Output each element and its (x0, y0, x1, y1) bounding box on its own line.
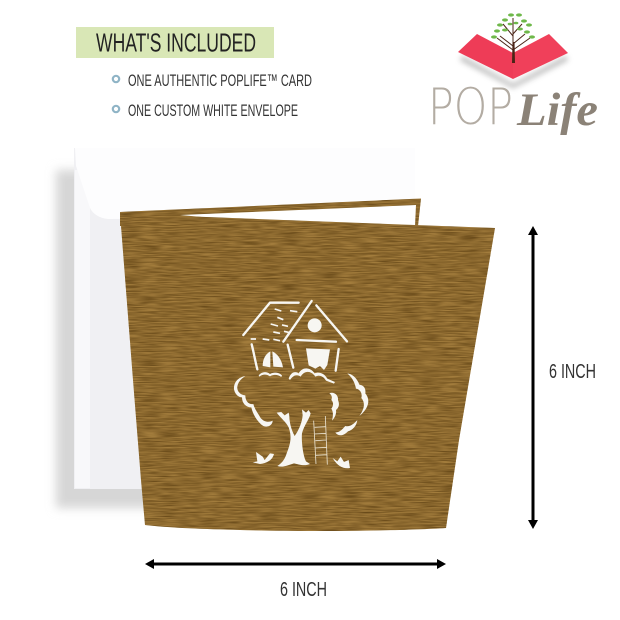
arrow: width dimension (145, 559, 446, 569)
grass right (333, 457, 350, 468)
logo: wordmark pop: POP (428, 78, 513, 136)
envelope: shadow (56, 170, 336, 508)
front window (306, 348, 330, 370)
logo: book shadow (460, 56, 568, 88)
card: treehouse cutout (234, 301, 368, 468)
tree trunk (277, 409, 311, 467)
logo: poplife (428, 13, 598, 136)
grass left (253, 452, 274, 464)
label: width 6 inch: 6 INCH (280, 579, 327, 601)
logo: tree (491, 13, 535, 63)
side windows (263, 351, 270, 367)
card: back panel (120, 198, 422, 228)
envelope: body (74, 148, 415, 489)
label: height 6 inch: 6 INCH (549, 361, 596, 383)
heading: what's included (76, 27, 274, 58)
list: included items: ONE AUTHENTIC POPLIFE™ CARD (128, 71, 312, 90)
arrow: height dimension (528, 226, 538, 529)
envelope (56, 148, 415, 508)
list: included items (113, 71, 312, 120)
heading: what's included: WHAT'S INCLUDED (96, 30, 256, 58)
card: front panel (118, 208, 498, 534)
round attic window (308, 318, 322, 332)
tree crown left outline (234, 376, 273, 427)
roof shingles (251, 309, 297, 341)
list: included items: ONE CUSTOM WHITE ENVELOPE (128, 101, 298, 120)
envelope: flap (75, 148, 415, 219)
leaf arcs (259, 372, 282, 377)
logo: red open book (458, 34, 568, 79)
tree crown right outline (347, 373, 368, 416)
logo: wordmark life: Life (516, 84, 598, 136)
roofs (243, 301, 347, 371)
greeting card (118, 198, 498, 534)
ladder (314, 416, 327, 465)
envelope: left seam shading (75, 170, 90, 488)
